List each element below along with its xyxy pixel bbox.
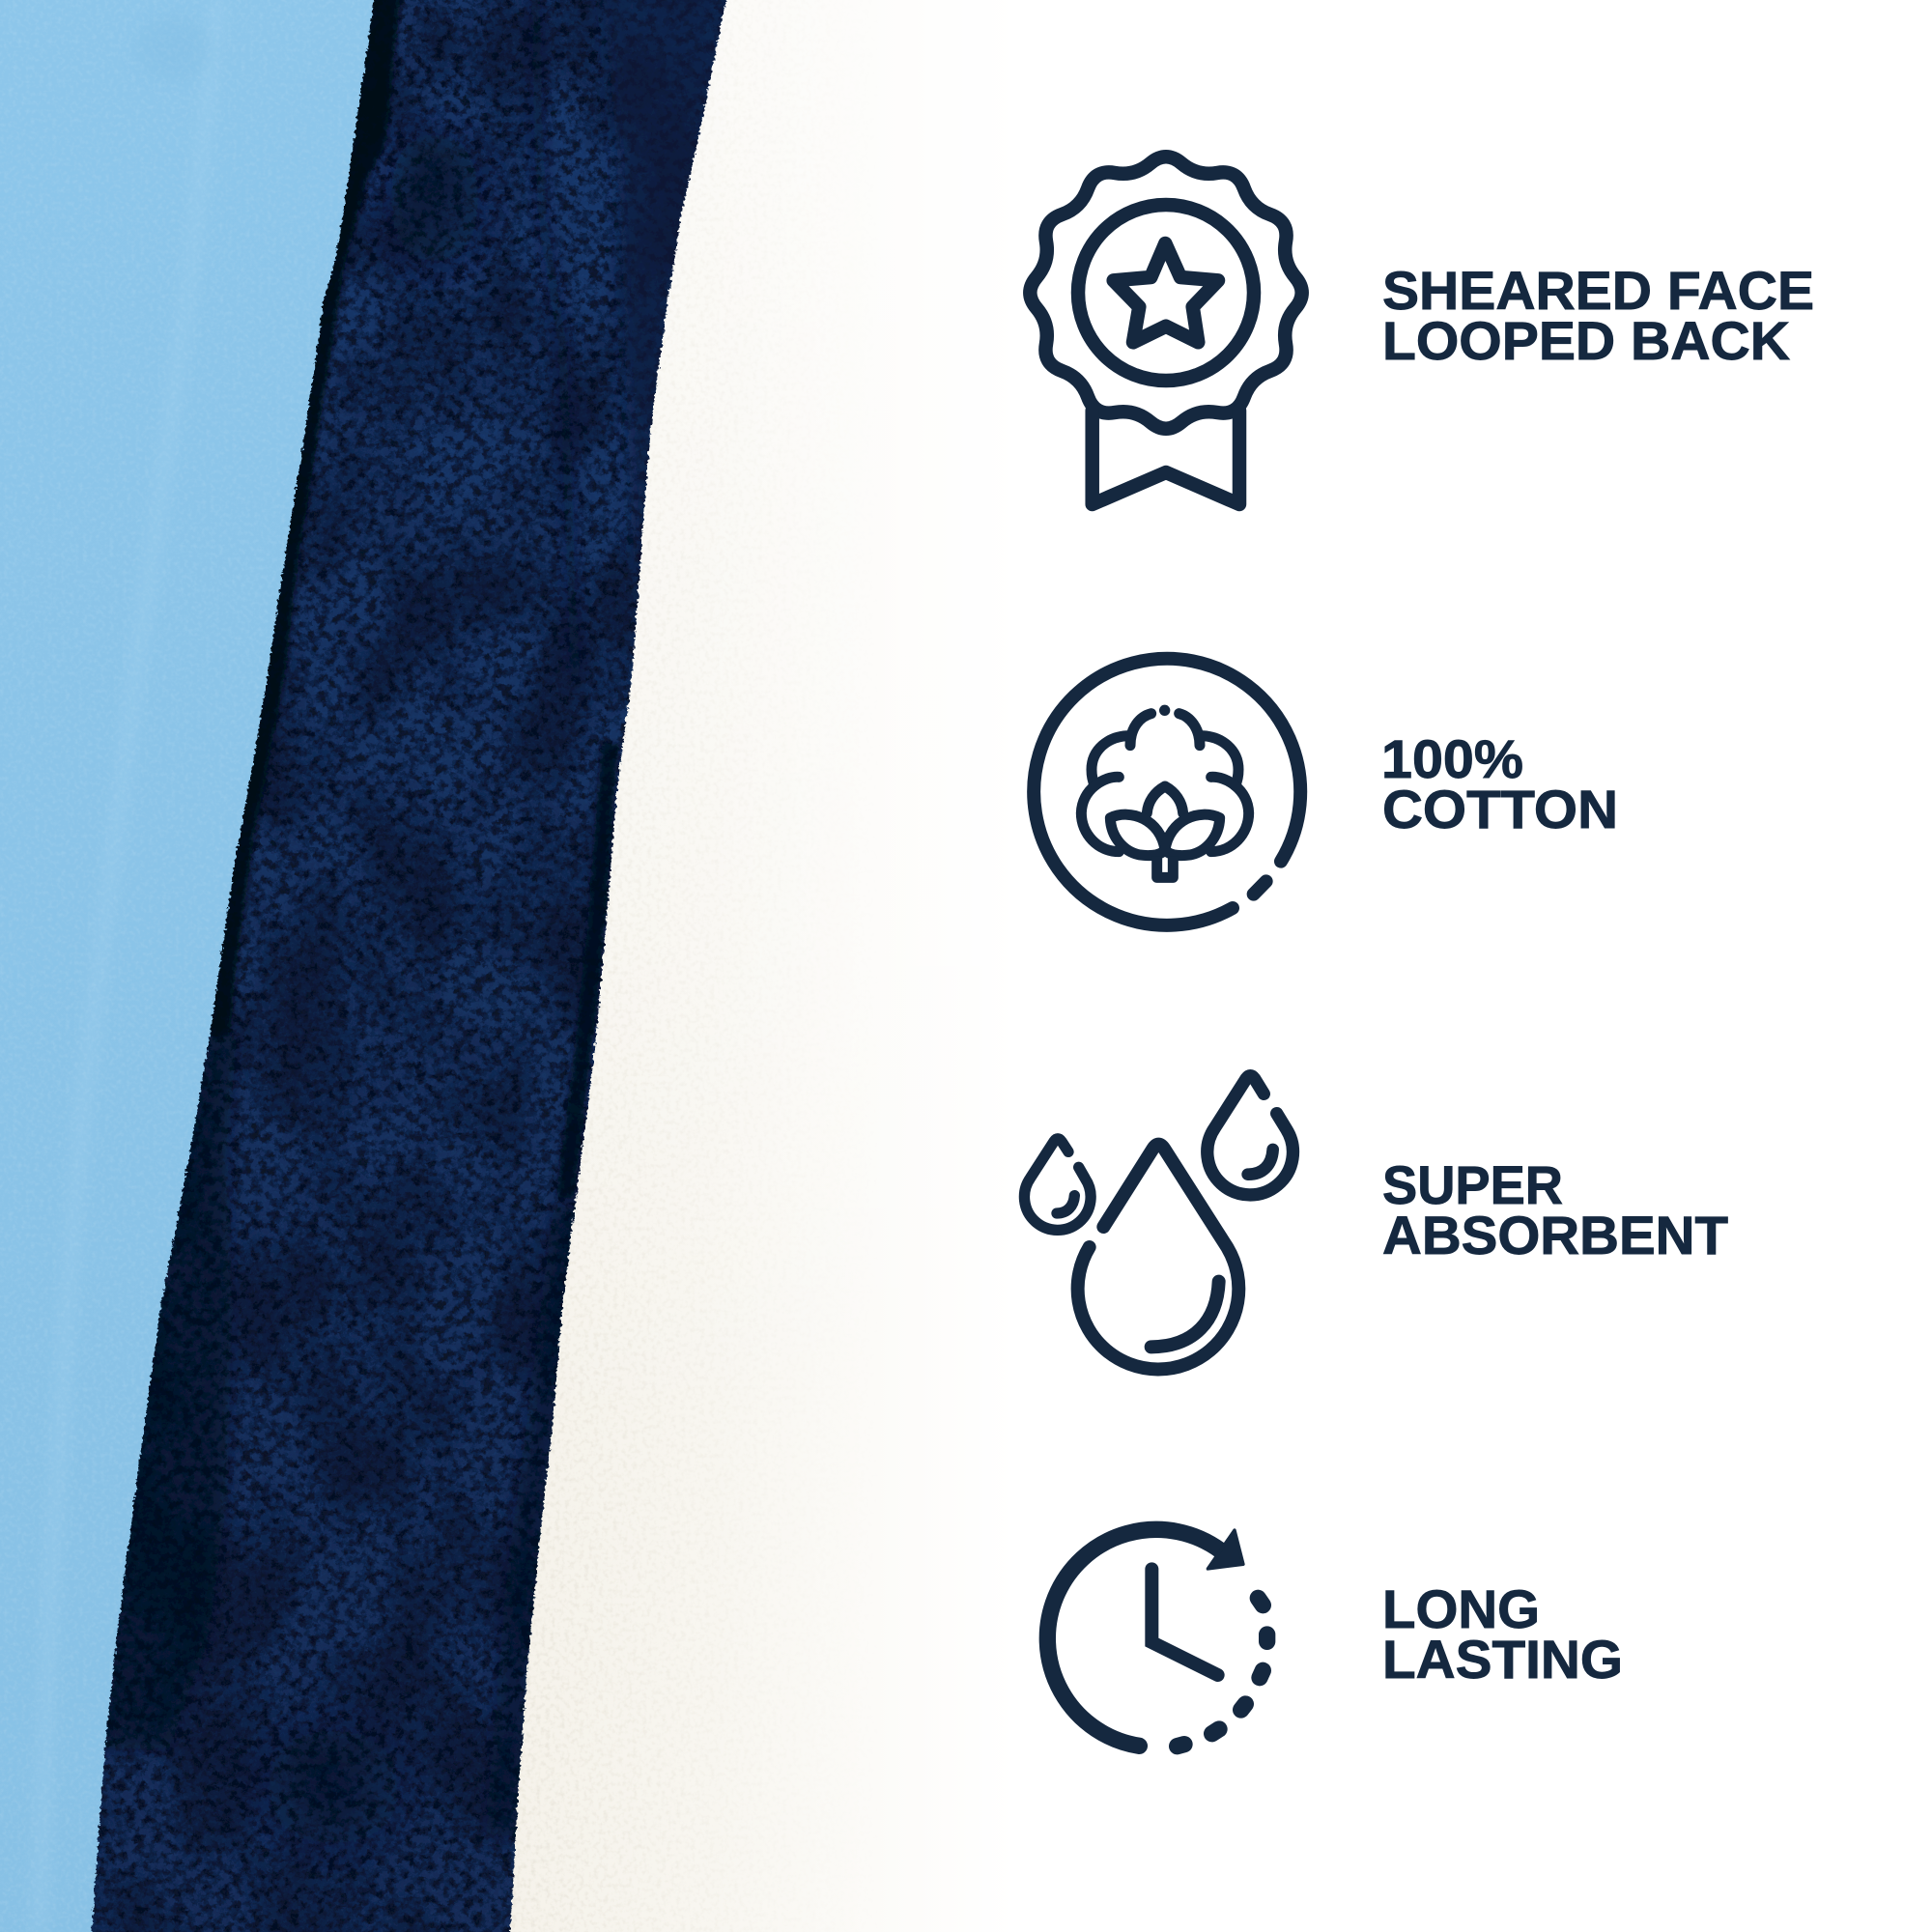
feature label: long lasting: LONG xyxy=(1382,1578,1540,1639)
feature label: super absorbent: SUPER xyxy=(1382,1154,1563,1215)
feature label: long lasting xyxy=(1382,1578,1623,1690)
feature label: sheared face looped back xyxy=(1382,260,1814,371)
icon: water drops xyxy=(1024,1076,1293,1369)
icon: cotton boll in circle xyxy=(1034,659,1300,925)
feature label: 100% cotton: 100% xyxy=(1381,728,1523,789)
feature label: long lasting: LASTING xyxy=(1382,1629,1623,1690)
feature label: super absorbent: ABSORBENT xyxy=(1382,1205,1728,1265)
feature label: super absorbent xyxy=(1382,1154,1728,1265)
white towel xyxy=(509,0,871,1932)
feature label: 100% cotton xyxy=(1381,728,1618,839)
icon: clock with arrow xyxy=(1047,1529,1267,1747)
feature label: sheared face looped back: SHEARED FACE xyxy=(1382,260,1814,321)
light blue towel xyxy=(0,0,406,1932)
navy towel xyxy=(58,0,753,1932)
icon: rosette badge with star xyxy=(1030,156,1302,504)
feature label: sheared face looped back: LOOPED BACK xyxy=(1382,310,1790,371)
photo: stacked towels xyxy=(0,0,1082,1932)
feature label: 100% cotton: COTTON xyxy=(1382,779,1618,839)
